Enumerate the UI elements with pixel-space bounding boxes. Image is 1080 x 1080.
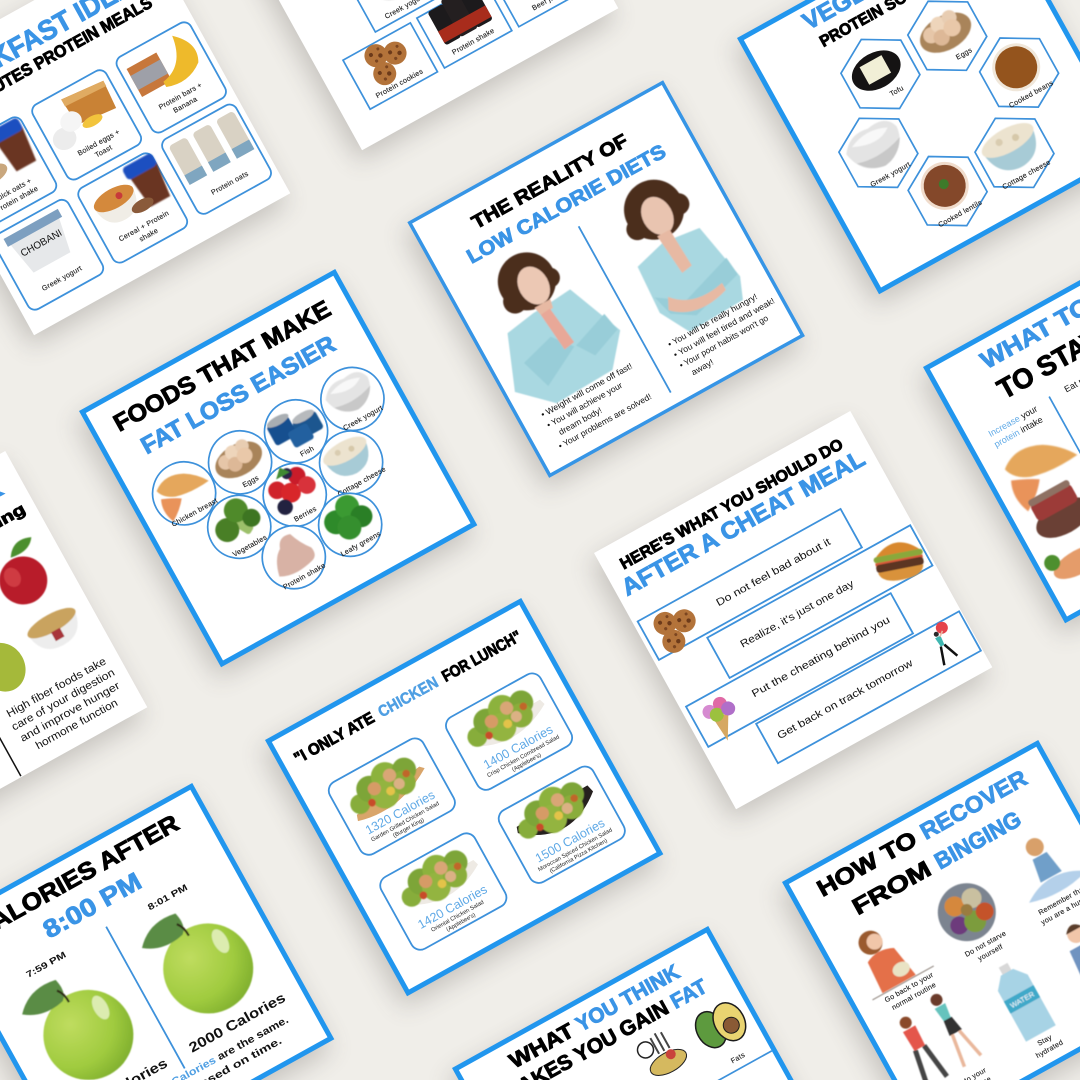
bullets: reality: [666, 285, 788, 381]
icon: meditating woman: [1002, 823, 1080, 907]
title: foods that make: FOODS THAT MAKE: [109, 295, 336, 437]
food: chicken: [997, 427, 1080, 513]
label: do not starve: yourself: [976, 942, 1004, 963]
hexagon: cottage cheese: [965, 102, 1064, 204]
circle: chicken breast: Chicken breast: [170, 496, 219, 529]
title: CHICKEN: [375, 674, 441, 721]
tile: greek yogurt: CHOBANI: [19, 228, 64, 259]
tile: protein shake: Protein shake: [450, 26, 496, 57]
hexagon: cooked beans: [970, 21, 1068, 124]
tile: greek yogurt: Greek yogurt: [40, 263, 83, 293]
step: realize: Realize, it's just one day: [738, 578, 857, 650]
tile: 1320 calories: Garden Grilled Chicken Salad: [370, 801, 440, 843]
label: do not starve: [963, 929, 1013, 967]
step: put the cheating behind you: [686, 593, 913, 747]
tile: boiled eggs: Toast: [93, 143, 114, 159]
hexagon: cooked lentils: Cooked lentils: [937, 198, 984, 229]
divider: [0, 591, 21, 776]
circle: berries: [252, 452, 338, 538]
text: high fiber foods: and improve hunger: [18, 680, 122, 745]
tile: 1420 calories: [377, 830, 510, 953]
circle: berries: Berries: [292, 504, 318, 524]
card: calories after 8:00 pm: [0, 786, 336, 1080]
divider: [106, 927, 185, 1068]
divider: [718, 1051, 772, 1080]
divider: [1049, 397, 1080, 565]
text: high fiber foods: [3, 654, 131, 758]
circle: protein shake: [251, 514, 337, 600]
tile: protein oats: [159, 102, 274, 217]
tile: 1500 calories: Moroccan Spiced Chicken Salad: [537, 827, 614, 873]
tile: protein shake: [415, 0, 512, 68]
bullets: reality: • Your poor habits won't go: [677, 313, 770, 370]
label: stay hydrated: hydrated: [1034, 1038, 1065, 1060]
card: the reality of low calorie diets: [401, 83, 807, 489]
label: 7:59 pm: 7:59 PM: [24, 950, 68, 980]
circle: vegetables: Vegetables: [231, 532, 269, 559]
icon: woman eating: [842, 911, 934, 1000]
icon: water bottle: WATER: [1009, 989, 1036, 1010]
icon: fork and food: [634, 1025, 691, 1080]
circle: eggs: Eggs: [241, 473, 260, 489]
title: FOR LUNCH": [439, 628, 525, 686]
step: put the cheating behind you: Put the cheating behind you: [750, 614, 892, 700]
tile: 1420 calories: 1420 Calories: [415, 882, 490, 932]
step: do not feel bad: Do not feel bad about it: [714, 536, 833, 609]
card: i only ate chicken for lunch: [259, 601, 665, 1007]
tile: protein bars: Banana: [171, 94, 199, 115]
title: low calorie diets: LOW CALORIE DIETS: [463, 141, 670, 268]
tile: 1320 calories: [325, 735, 459, 858]
hexagon: cottage cheese: Cottage cheese: [1001, 157, 1052, 191]
label: stay hydrated: Stay: [1036, 1032, 1054, 1048]
title: 8:00 pm: 8:00 PM: [38, 867, 146, 944]
text: high fiber foods: care of your digestion: [10, 667, 117, 733]
icon: burger: [871, 538, 927, 584]
tile: protein cookies: Protein cookies: [374, 66, 425, 100]
step: realize: [707, 525, 932, 678]
card: high fiber foods: [0, 451, 151, 860]
card: foods that make fat loss easier: [73, 272, 479, 678]
tile: 1400 calories: [442, 670, 576, 793]
tile: protein bars: Protein bars +: [157, 80, 204, 112]
bullets: promises: • Your problems are solved!: [556, 391, 653, 451]
label: fats: Fats: [729, 1050, 747, 1065]
title: "I ONLY ATE: [292, 709, 378, 768]
bullets: reality: away!: [689, 357, 715, 377]
divider: [579, 226, 671, 393]
bullets: promises: dream body!: [557, 405, 604, 437]
hexagon: tofu: [831, 23, 929, 125]
tile: 1420 calories: (Applebee's): [446, 912, 477, 933]
card: what to eat to stay full: [917, 228, 1080, 634]
hexagon: cooked beans: Cooked beans: [1007, 78, 1055, 110]
hexagon: eggs: Eggs: [954, 45, 974, 62]
icon: ice cream: [699, 692, 748, 745]
tile: 1400 calories: (Applebee's): [511, 752, 543, 773]
food: steak: [1022, 475, 1080, 546]
title: how to recover: [812, 764, 1032, 902]
circle: fish: Fish: [298, 444, 316, 458]
title: here's what you should do: HERE'S WHAT YOU SHOULD DO: [618, 436, 846, 573]
apple: right: [135, 889, 269, 1031]
tile: 1500 calories: (California Pizza Kitchen): [549, 838, 609, 875]
circle: vegetables: [196, 484, 282, 570]
food: oats bowl: [24, 602, 87, 658]
bullets: reality: • You will feel tired and weak!: [672, 296, 776, 360]
text: right calories: 2000 Calories: [186, 989, 288, 1055]
icon: stressed person: [1055, 916, 1080, 997]
food: salmon: [1041, 531, 1080, 588]
circle: greek yogurt: [310, 356, 395, 442]
title: how to recover: RECOVER: [916, 764, 1032, 844]
food: pear: [0, 635, 34, 700]
title: [292, 628, 525, 768]
tile: 1400 calories: Crisp Chicken Cornbread Salad: [486, 734, 561, 779]
title: fat loss easier: FAT LOSS EASIER: [136, 331, 340, 460]
icon: water bottle: [988, 957, 1056, 1042]
card: after a cheat meal: [587, 411, 996, 820]
bullets: promises: • Weight will come off fast!: [539, 361, 634, 419]
title: makes you gain fat: [499, 975, 711, 1080]
circle: eggs: [197, 420, 283, 505]
circle: leafy greens: [307, 482, 393, 568]
tile: protein cookies: [343, 23, 437, 109]
text: increase protein: Increase your: [987, 404, 1039, 439]
bullets: promises: [539, 360, 653, 451]
tile: 1400 calories: 1400 Calories: [481, 722, 555, 772]
title: after a cheat meal: AFTER A CHEAT MEAL: [617, 445, 870, 602]
tile: cereal: [75, 150, 191, 266]
text: increase protein: protein intake: [992, 414, 1045, 449]
icon: avocado: [689, 996, 752, 1056]
title: what you think: YOU THINK: [572, 961, 684, 1036]
hexagon: greek yogurt: Greek yogurt: [869, 160, 912, 189]
card: protein foods: [213, 0, 622, 161]
tile: 1420 calories: Oriental Chicken Salad: [430, 900, 485, 934]
tile: greek yogurt: [0, 197, 106, 313]
circle: greek yogurt: Creek yogurt: [341, 403, 384, 432]
hexagon: cooked lentils: [899, 140, 997, 242]
icon: workout couple: [890, 989, 982, 1080]
hexagon: greek yogurt: [829, 102, 927, 204]
tile: 1320 calories: (Burger King): [392, 817, 425, 839]
label: stay hydrated: [1029, 1029, 1065, 1060]
person: doubtful woman: [600, 163, 752, 340]
food: red apple: [0, 535, 59, 613]
title: from binging: BINGING: [930, 805, 1025, 874]
title: how to recover: HOW TO: [812, 826, 921, 902]
label: go back to normal routine: normal routine: [890, 980, 938, 1012]
title: what you think: [506, 961, 684, 1073]
card: breakfast ideas: [0, 0, 294, 346]
tile: 1500 calories: 1500 Calories: [533, 816, 607, 866]
label: go back to normal routine: Go back to your: [883, 970, 935, 1004]
step: get back on track: [756, 611, 981, 763]
tile: boiled eggs: [29, 67, 144, 182]
step: get back on track: Get back on track tomorrow: [775, 657, 915, 742]
text: high fiber foods: High fiber foods take: [5, 655, 108, 720]
bullets: promises: • You will achieve your: [545, 380, 624, 430]
tile: 1500 calories: [495, 763, 628, 887]
hexagon: eggs: [898, 0, 996, 87]
label: do not starve: Do not starve: [963, 929, 1008, 959]
tile: boiled eggs: Boiled eggs +: [76, 127, 121, 158]
text: high fiber foods: hormone function: [34, 697, 120, 752]
tile: 1320 calories: 1320 Calories: [363, 788, 437, 837]
icon: cookies: [649, 599, 706, 657]
tile: protein oats: Protein oats: [209, 169, 250, 197]
card: vegetarian protein sources: [731, 0, 1080, 305]
circle: protein shake: Protein shake: [281, 561, 327, 591]
tile: beef jerky: [491, 0, 586, 27]
card: how to recover from binging: [776, 743, 1080, 1080]
icon: exercising woman: [925, 620, 964, 665]
text: increase protein: [987, 404, 1045, 449]
tile: cereal: Cereal + Protein: [117, 208, 170, 243]
icon: salad bowl: [927, 873, 1006, 952]
circle: fish: [253, 388, 339, 474]
card: what you think makes you gain fat: [446, 929, 852, 1080]
tile: greek yogurt: [348, 0, 443, 32]
circle: chicken breast: [141, 451, 227, 536]
apple: left: [15, 956, 150, 1080]
hexagon: tofu: Tofu: [888, 83, 905, 98]
tile: cereal: shake: [137, 226, 160, 243]
title: what you think: WHAT: [506, 1019, 578, 1073]
bullets: reality: • You will be really hungry!: [666, 291, 759, 349]
step: do not feel bad: [638, 509, 862, 660]
tile: protein bars: [114, 19, 229, 135]
label: 8:01 pm: 8:01 PM: [146, 882, 189, 912]
title: makes you gain fat: FAT: [667, 975, 711, 1014]
title: from binging: [848, 805, 1025, 920]
title: the reality of: THE REALITY OF: [468, 131, 632, 234]
circle: cottage cheese: [308, 420, 394, 505]
title: from binging: FROM: [848, 855, 935, 920]
circle: cottage cheese: Cottage cheese: [336, 464, 387, 498]
circle: leafy greens: Leafy greens: [339, 529, 382, 558]
tile: quick oats: [0, 114, 59, 229]
person: hopeful woman: [457, 228, 636, 418]
